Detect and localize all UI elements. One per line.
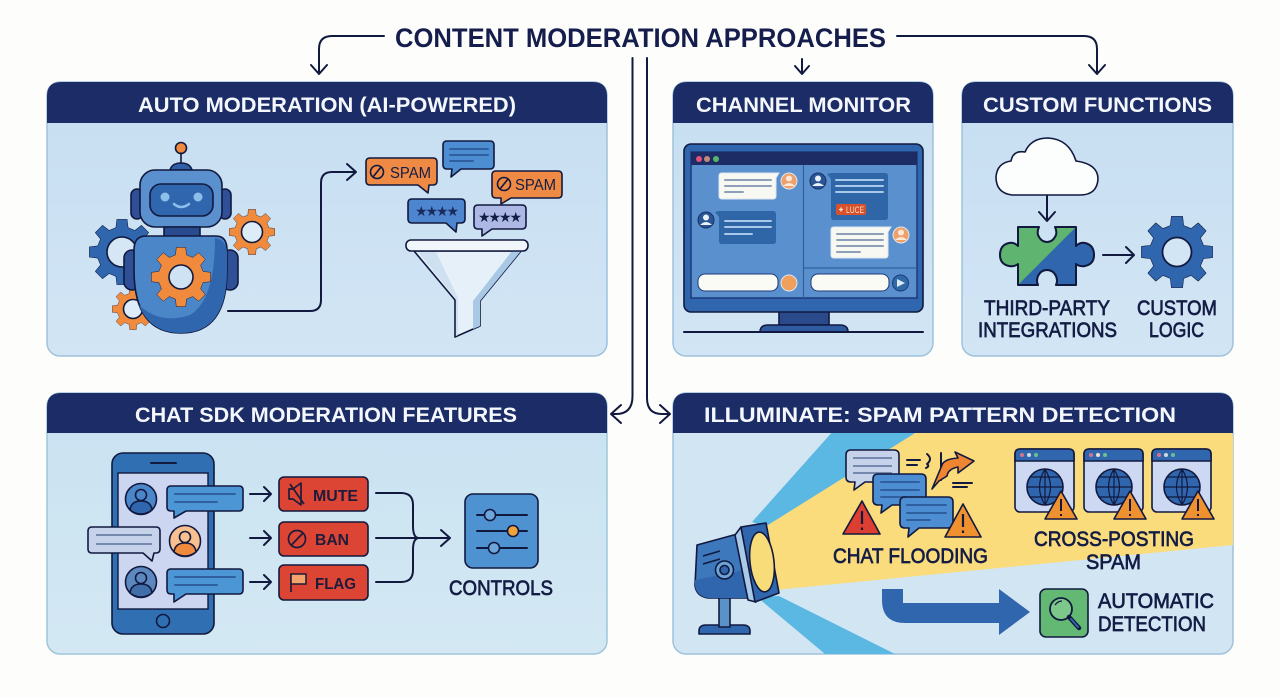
panel: chat SDK moderation features: [47, 393, 607, 654]
arrow: merge to controls: [376, 493, 450, 582]
arrow: to mute: [250, 487, 271, 501]
arrow: title to channel monitor: [795, 59, 809, 74]
title: CONTENT MODERATION APPROACHES: [395, 23, 886, 53]
arrow: puzzle to gear: [1103, 247, 1134, 263]
chat: left white message: [719, 173, 797, 199]
button: mute: [279, 477, 368, 511]
panel: auto moderation: [47, 82, 607, 356]
label: cross-posting spam: SPAM: [1086, 551, 1141, 574]
icon: spam bubble 2: [492, 171, 562, 204]
chat: left blue message: [698, 211, 776, 244]
arrow: title to chat SDK: [611, 58, 632, 423]
label: chat flooding: CHAT FLOODING: [833, 545, 988, 568]
icon: flood bubble 1: [846, 450, 899, 490]
icon: chat bubble top: [167, 486, 243, 518]
button: ban: [279, 522, 368, 556]
icon: flood lines and orange arrow: [907, 452, 974, 489]
label: automatic detection: DETECTION: [1098, 613, 1206, 636]
icon: star rating bubble 2: [474, 205, 526, 236]
panel: custom functions: [962, 82, 1233, 356]
arrow: title to auto moderation: [311, 36, 384, 74]
header: channel monitor: CHANNEL MONITOR: [696, 94, 911, 117]
header: illuminate: [673, 393, 1233, 433]
arrow: to ban: [250, 531, 271, 545]
arrow: robot to filter: [228, 164, 356, 311]
header: channel monitor: [673, 82, 933, 123]
icon: blue message bubble: [443, 141, 494, 177]
icon: magnifier on green tile: [1040, 589, 1088, 637]
label: cross-posting spam: [1034, 528, 1194, 574]
icon: orange gear right: [229, 209, 275, 255]
icon: robot: [124, 142, 238, 333]
panel: illuminate spam pattern detection: [673, 393, 1233, 654]
header: custom functions: [962, 82, 1233, 123]
icon: funnel: [406, 240, 528, 337]
icon: spam bubble 1: SPAM: [390, 165, 431, 182]
icon: orange warning: [945, 504, 981, 537]
chat: right blue message with red tag: LUCE: [846, 205, 864, 215]
header: auto moderation: [47, 82, 607, 123]
icon: chat bubble bottom: [167, 569, 243, 602]
chat: right white message: [831, 227, 909, 258]
icon: flood bubble 3: [900, 497, 953, 537]
label: third-party integrations: INTEGRATIONS: [978, 319, 1117, 342]
chat: right blue message with red tag: [810, 173, 888, 220]
button: flag: FLAG: [315, 576, 356, 593]
label: third-party integrations: [978, 297, 1117, 342]
icon: desktop monitor: [684, 144, 923, 332]
spotlight beams: [752, 430, 1233, 654]
icon: cloud: [996, 138, 1098, 195]
button: ban: BAN: [315, 532, 349, 549]
icon: flood bubble 2: [873, 474, 926, 513]
icon: blue gear behind robot: [89, 219, 155, 285]
button: mute: MUTE: [313, 488, 358, 505]
icon: browser window 3: [1152, 449, 1214, 519]
icon: chat bubble middle: [88, 527, 160, 561]
icon: avatar top: [126, 484, 156, 514]
icon: star rating bubble 1: [408, 199, 465, 232]
header: custom functions: CUSTOM FUNCTIONS: [983, 94, 1212, 117]
icon: custom logic gear: [1141, 216, 1213, 288]
label: cross-posting spam: CROSS-POSTING: [1034, 528, 1194, 551]
arrow: title to illuminate: [647, 58, 670, 423]
icon: spotlight: [695, 523, 779, 634]
label: custom logic: LOGIC: [1149, 319, 1204, 342]
arrow: big blue detection arrow: [882, 589, 1030, 635]
icon: avatar bottom: [126, 566, 156, 598]
arrow: cloud to puzzle: [1039, 196, 1055, 221]
icon: puzzle piece: [1000, 227, 1094, 285]
icon: browser window 2: [1084, 449, 1146, 519]
panel: channel monitor: [673, 82, 933, 356]
label: custom logic: [1137, 297, 1217, 342]
icon: smartphone: [112, 453, 214, 634]
icon: avatar orange: [170, 526, 200, 556]
label: custom logic: CUSTOM: [1137, 297, 1217, 320]
icon: spam bubble 2: SPAM: [515, 177, 556, 194]
icon: star rating bubble 2: ★★★★: [478, 209, 522, 225]
arrow: title to custom functions: [897, 36, 1105, 74]
header: auto moderation: AUTO MODERATION (AI-POWERED): [138, 94, 516, 117]
icon: small orange gear bottom: [112, 288, 154, 330]
button: flag: [279, 565, 368, 600]
input: right message field: [811, 274, 908, 291]
label: controls: CONTROLS: [449, 577, 553, 600]
icon: star rating bubble 1: ★★★★: [415, 203, 459, 219]
icon: spam bubble 1: [366, 158, 437, 193]
input: left message field: [698, 274, 797, 291]
header: chat SDK: CHAT SDK MODERATION FEATURES: [135, 404, 517, 427]
label: automatic detection: AUTOMATIC: [1098, 590, 1214, 613]
label: automatic detection: [1098, 590, 1214, 636]
icon: controls sliders: [465, 494, 538, 568]
header: illuminate: ILLUMINATE: SPAM PATTERN DETECTION: [704, 404, 1176, 427]
header: chat SDK: [47, 393, 607, 433]
icon: browser window 1: [1015, 449, 1077, 519]
arrow: to flag: [250, 575, 271, 589]
icon: red warning: [843, 501, 880, 534]
label: third-party integrations: THIRD-PARTY: [984, 297, 1110, 320]
